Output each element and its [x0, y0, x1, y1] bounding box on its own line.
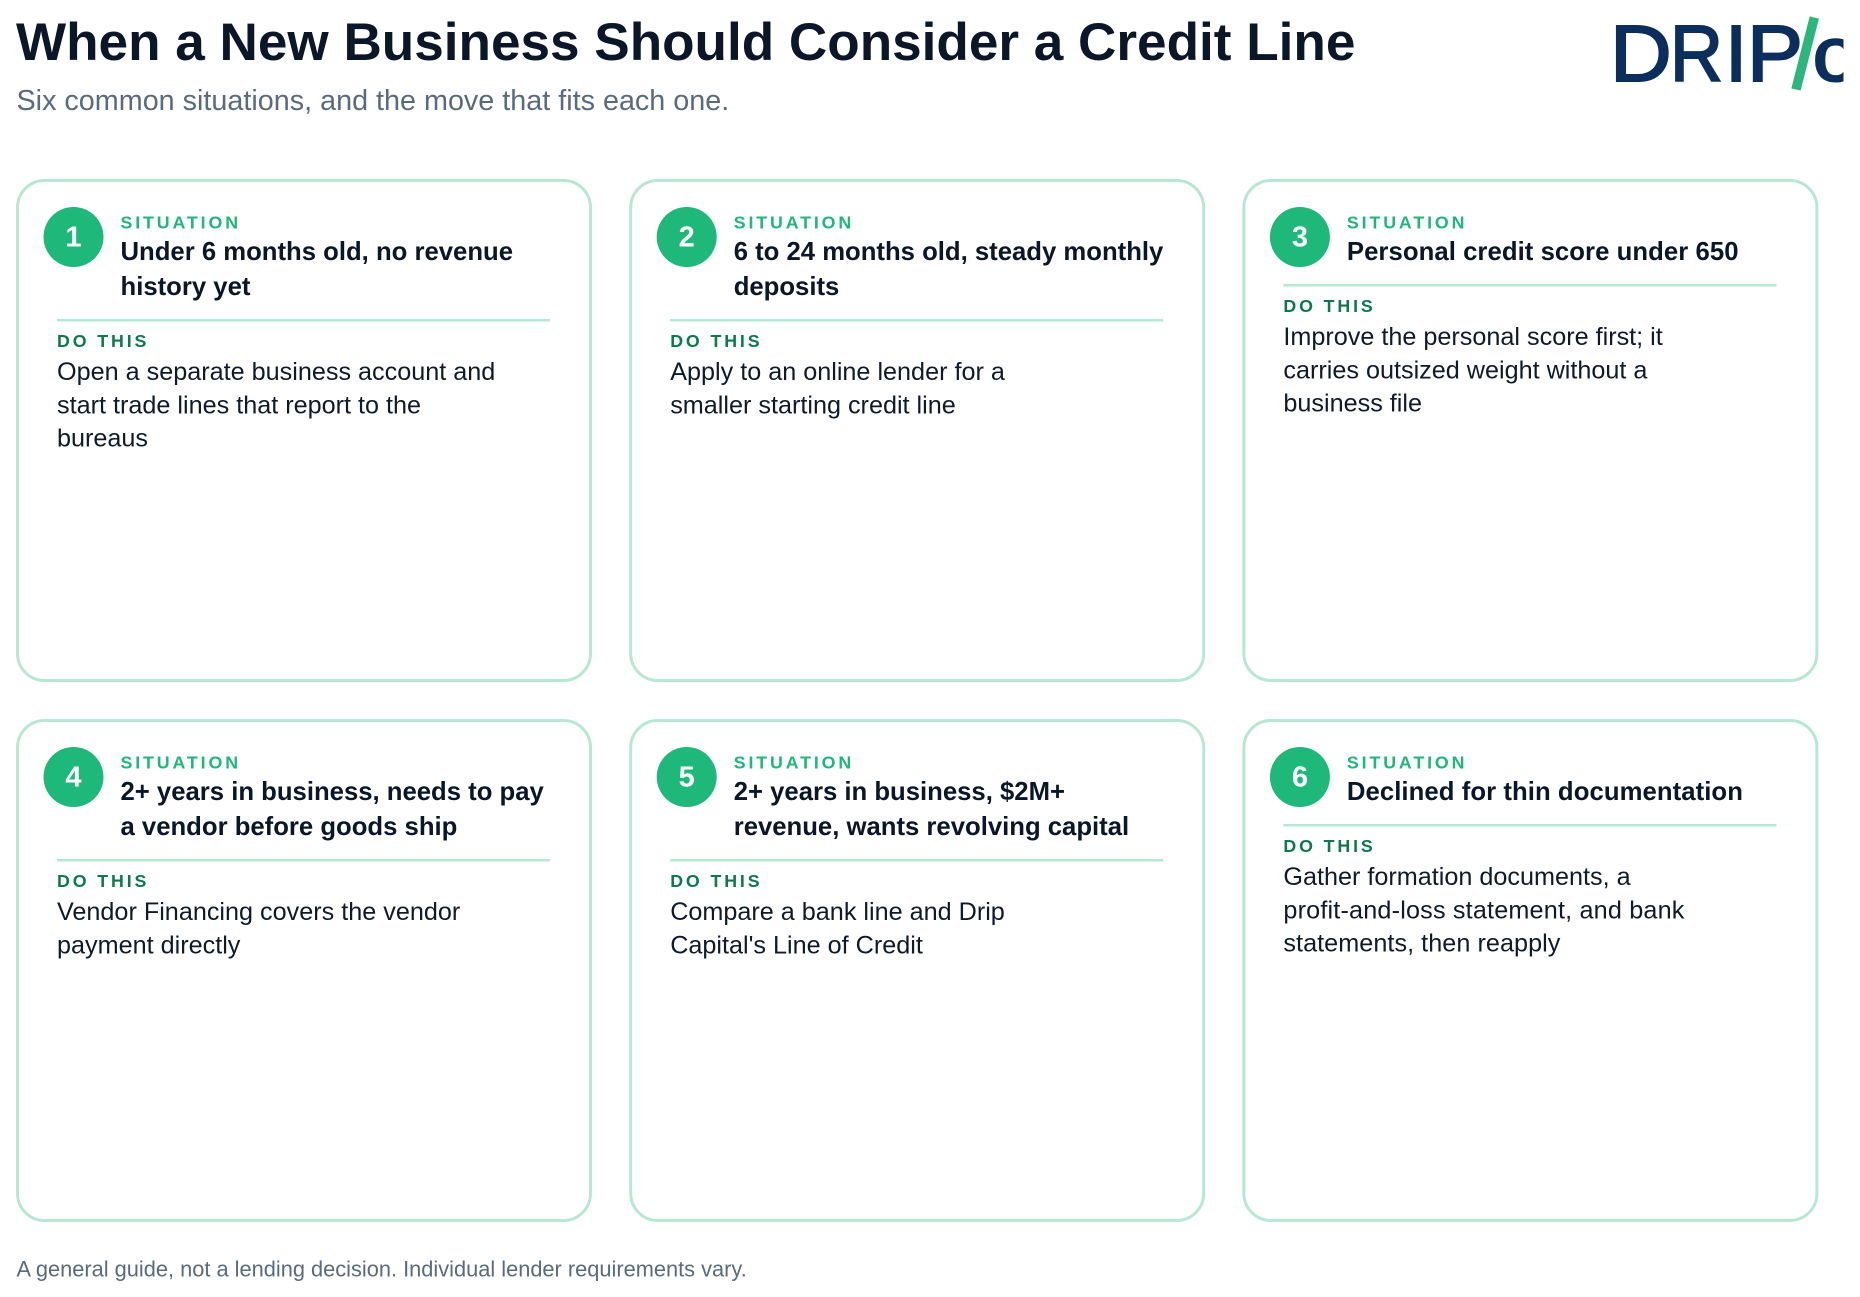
action text: bureaus	[57, 425, 148, 453]
situation label: SITUATION	[120, 752, 241, 772]
action text: smaller starting credit line	[670, 391, 956, 419]
number badge 6	[1270, 747, 1330, 807]
action text: start trade lines that report to the	[57, 391, 421, 419]
situation label: SITUATION	[1347, 212, 1467, 232]
action text: Compare a bank line and Drip	[670, 898, 1005, 926]
panel: situation 4	[18, 720, 590, 1220]
panel: situation 3	[1244, 180, 1817, 680]
action text: Capital's Line of Credit	[670, 931, 923, 959]
logo: Drip Capital: c	[1812, 12, 1856, 98]
number badge 1	[44, 207, 104, 267]
situation heading: a vendor before goods ship	[120, 813, 457, 841]
action text: Apply to an online lender for a	[670, 358, 1006, 386]
situation heading: Under 6 months old, no revenue	[120, 238, 513, 266]
title: When a New Business Should Consider a Credit Line	[16, 13, 1355, 72]
situation label: SITUATION	[120, 212, 241, 232]
panel: situation 6	[1244, 720, 1817, 1220]
do this label: DO THIS	[1283, 296, 1376, 316]
do this label: DO THIS	[1283, 836, 1376, 856]
number badge 3	[1270, 207, 1330, 267]
situation heading: Personal credit score under 650	[1347, 238, 1738, 266]
action text: Improve the personal score first; it	[1283, 323, 1663, 351]
situation label: SITUATION	[1347, 752, 1467, 772]
number badge 5: 5	[679, 762, 695, 794]
action text: business file	[1283, 390, 1422, 418]
number badge 4	[44, 747, 104, 807]
panel: situation 2	[631, 180, 1204, 680]
footnote: A general guide, not a lending decision. Individual lender requirements vary.	[16, 1256, 747, 1282]
do this label: DO THIS	[670, 331, 762, 351]
situation heading: revenue, wants revolving capital	[734, 813, 1129, 841]
action text: Open a separate business account and	[57, 358, 495, 386]
action text: payment directly	[57, 931, 241, 959]
panel: situation 6: profit-and-loss statement, and bank	[1283, 896, 1685, 924]
action text: Vendor Financing covers the vendor	[57, 898, 460, 926]
subtitle: Six common situations, and the move that fits each one.	[16, 85, 729, 117]
logo: Drip Capital: P	[1747, 9, 1803, 98]
number badge 2	[657, 207, 717, 267]
panel: situation 1	[18, 180, 590, 680]
situation heading: Declined for thin documentation	[1347, 778, 1743, 806]
logo: Drip Capital	[1616, 16, 1844, 91]
logo: Drip Capital: D	[1610, 9, 1672, 98]
panel: situation 6: statements, then reapply	[1283, 930, 1561, 958]
situation heading: deposits	[734, 273, 839, 301]
action text: carries outsized weight without a	[1283, 356, 1648, 384]
do this label: DO THIS	[670, 871, 762, 891]
situation heading: 2+ years in business, $2M+	[734, 778, 1065, 806]
panel: situation 5	[631, 720, 1204, 1220]
number badge 6: 6	[1292, 762, 1308, 794]
number badge 3: 3	[1292, 222, 1308, 254]
action text: Gather formation documents, a	[1283, 863, 1632, 891]
situation heading: 6 to 24 months old, steady monthly	[734, 238, 1164, 266]
do this label: DO THIS	[57, 871, 149, 891]
number badge 4: 4	[65, 762, 82, 794]
situation heading: history yet	[120, 273, 251, 301]
number badge 2: 2	[679, 222, 695, 254]
do this label: DO THIS	[57, 331, 149, 351]
situation label: SITUATION	[734, 212, 854, 232]
logo: Drip Capital: I	[1725, 9, 1747, 98]
number badge 1: 1	[65, 222, 82, 254]
logo: Drip Capital: R	[1670, 9, 1723, 98]
number badge 5	[657, 747, 717, 807]
situation heading: 2+ years in business, needs to pay	[120, 778, 545, 806]
situation label: SITUATION	[734, 752, 854, 772]
